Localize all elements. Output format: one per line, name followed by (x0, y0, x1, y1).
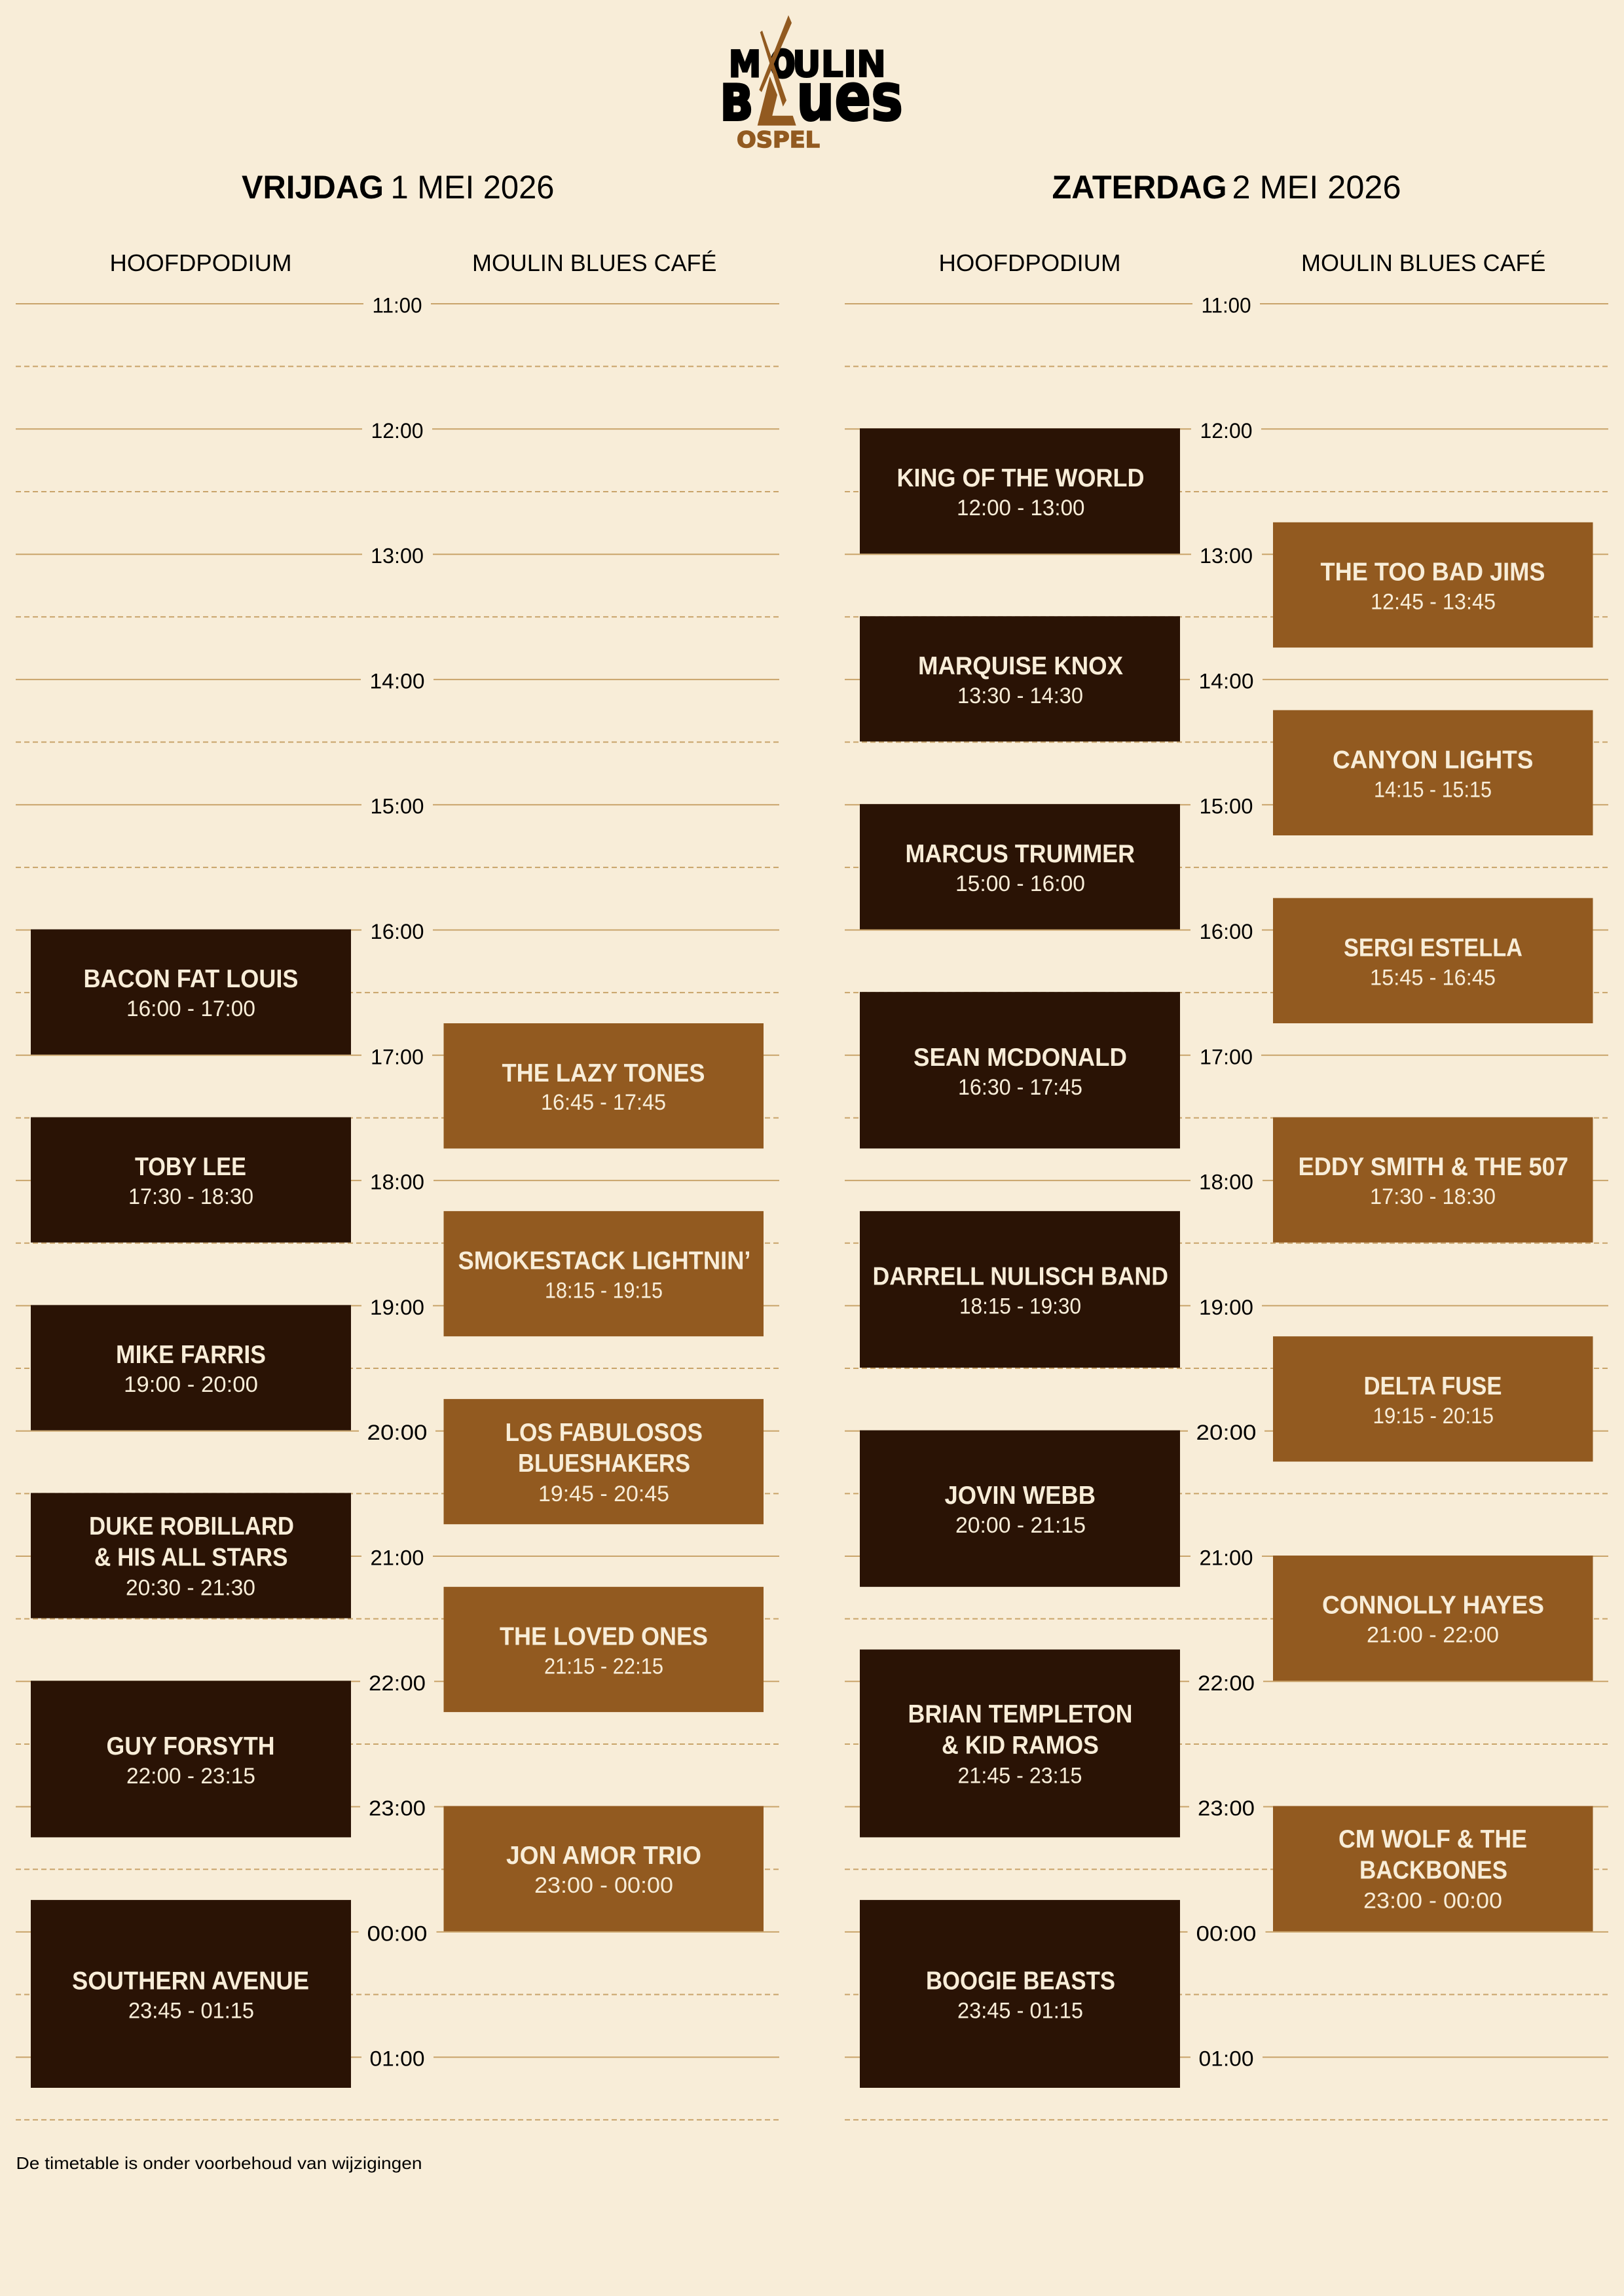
act: Jon Amor Trio (444, 1806, 764, 1931)
day heading: Vrijdag: 1 MEI 2026 (390, 169, 554, 206)
time axis labels: 20:00 (367, 1421, 427, 1444)
act: Marquise Knox (860, 616, 1180, 742)
time axis labels: 23:00 (1198, 1796, 1255, 1820)
act: The Too Bad Jims (1273, 522, 1593, 647)
time axis labels: 19:00 (1199, 1296, 1253, 1319)
logo: Moulin Blues Ospel: M (729, 43, 761, 85)
stage heading: Hoofdpodium: HOOFDPODIUM (110, 249, 292, 276)
time axis labels: 00:00 (1196, 1922, 1256, 1945)
act: Marquise Knox: MARQUISE KNOX (918, 652, 1123, 680)
time axis labels: 01:00 (369, 2047, 424, 2071)
time axis labels: 19:00 (370, 1296, 424, 1319)
time axis labels: 16:00 (1200, 920, 1253, 943)
time axis labels: 15:00 (371, 795, 424, 818)
time axis labels (367, 293, 427, 2071)
act: Southern Avenue: 23:45 - 01:15 (128, 1998, 254, 2023)
logo: Moulin Blues Ospel: ULIN (792, 43, 886, 85)
act: Toby Lee (31, 1117, 351, 1243)
act: Guy Forsyth: GUY FORSYTH (106, 1732, 275, 1760)
act: The Lazy Tones: 16:45 - 17:45 (541, 1090, 666, 1115)
time axis labels: 14:00 (1198, 669, 1253, 693)
act: Duke Robillard & His All Stars (31, 1493, 351, 1618)
act: CM Wolf & The Backbones (1273, 1806, 1593, 1931)
act: Eddy Smith & The 507: 17:30 - 18:30 (1370, 1184, 1496, 1209)
act: The Loved Ones (444, 1587, 764, 1712)
time axis labels: 13:00 (1200, 544, 1253, 568)
act: Southern Avenue: SOUTHERN AVENUE (72, 1967, 309, 1995)
logo: Moulin Blues Ospel: B (720, 74, 753, 132)
act: Darrell Nulisch Band (860, 1211, 1180, 1368)
act: Sergi Estella (1273, 898, 1593, 1023)
act: Brian Templeton & Kid Ramos: BRIAN TEMPLETON (908, 1700, 1133, 1728)
act: Bacon Fat Louis (31, 930, 351, 1055)
act: The Too Bad Jims: 12:45 - 13:45 (1371, 589, 1496, 614)
act: Canyon Lights: CANYON LIGHTS (1333, 746, 1534, 774)
time axis labels: 11:00 (372, 293, 422, 317)
act: Delta Fuse (1273, 1336, 1593, 1461)
act: Canyon Lights: 14:15 - 15:15 (1374, 777, 1492, 802)
time axis labels (1196, 293, 1256, 2071)
act: Duke Robillard & His All Stars: 20:30 - 21:30 (126, 1575, 255, 1600)
act: Jovin Webb: 20:00 - 21:15 (955, 1513, 1086, 1538)
act: Smokestack Lightnin': SMOKESTACK LIGHTNIN’ (458, 1247, 750, 1275)
time axis labels: 13:00 (371, 544, 424, 568)
act: Jon Amor Trio: 23:00 - 00:00 (534, 1873, 673, 1898)
day heading: Zaterdag: ZATERDAG (1052, 169, 1227, 206)
act: The Too Bad Jims: THE TOO BAD JIMS (1320, 558, 1545, 587)
time axis labels: 22:00 (1198, 1671, 1255, 1695)
act: Los Fabulosos Blueshakers: LOS FABULOSOS (506, 1419, 703, 1447)
act: Sean McDonald: 16:30 - 17:45 (958, 1075, 1082, 1100)
act: Smokestack Lightnin': 18:15 - 19:15 (545, 1278, 663, 1303)
act: Smokestack Lightnin' (444, 1211, 764, 1336)
stage heading: Hoofdpodium: HOOFDPODIUM (939, 249, 1121, 276)
act: Guy Forsyth (31, 1681, 351, 1837)
act: Eddy Smith & The 507 (1273, 1117, 1593, 1243)
time axis labels: 01:00 (1198, 2047, 1253, 2071)
act: Bacon Fat Louis: 16:00 - 17:00 (126, 996, 255, 1021)
act: Southern Avenue (31, 1900, 351, 2088)
time axis labels: 21:00 (1200, 1546, 1253, 1570)
time axis labels: 14:00 (369, 669, 424, 693)
act: Toby Lee: TOBY LEE (135, 1153, 246, 1181)
time axis labels: 21:00 (371, 1546, 424, 1570)
logo: Moulin Blues Ospel (720, 15, 903, 153)
act: Brian Templeton & Kid Ramos: & KID RAMOS (942, 1731, 1099, 1760)
act: Marcus Trummer: MARCUS TRUMMER (905, 840, 1135, 868)
act: CM Wolf & The Backbones: CM WOLF & THE (1338, 1825, 1527, 1853)
act: Boogie Beasts (860, 1900, 1180, 2088)
act: Canyon Lights (1273, 710, 1593, 835)
act: Toby Lee: 17:30 - 18:30 (128, 1184, 253, 1209)
time axis labels: 18:00 (1199, 1171, 1253, 1194)
act: King of the World: 12:00 - 13:00 (957, 496, 1084, 520)
time axis labels: 00:00 (367, 1922, 427, 1945)
act: Boogie Beasts: BOOGIE BEASTS (926, 1967, 1115, 1995)
act: Los Fabulosos Blueshakers: 19:45 - 20:45 (538, 1482, 669, 1506)
act: Darrell Nulisch Band: 18:15 - 19:30 (959, 1294, 1081, 1319)
act: The Lazy Tones: THE LAZY TONES (502, 1059, 705, 1087)
act: Delta Fuse: DELTA FUSE (1363, 1372, 1502, 1400)
act: Los Fabulosos Blueshakers (444, 1399, 764, 1524)
act: Darrell Nulisch Band: DARRELL NULISCH BAND (872, 1262, 1168, 1291)
day heading: Zaterdag (1052, 169, 1401, 206)
act: Bacon Fat Louis: BACON FAT LOUIS (84, 965, 299, 993)
time axis labels: 22:00 (369, 1671, 426, 1695)
act: Marcus Trummer (860, 804, 1180, 930)
time axis labels: 17:00 (1200, 1045, 1253, 1068)
act: Marcus Trummer: 15:00 - 16:00 (955, 871, 1085, 896)
logo: Moulin Blues Ospel: ues (796, 59, 903, 136)
act: Brian Templeton & Kid Ramos (860, 1650, 1180, 1837)
act: Boogie Beasts: 23:45 - 01:15 (957, 1998, 1083, 2023)
time axis labels: 23:00 (369, 1796, 426, 1820)
panel: Zaterdag 2 mei 2026 (860, 169, 1593, 2088)
act: Marquise Knox: 13:30 - 14:30 (957, 683, 1083, 708)
act: Eddy Smith & The 507: EDDY SMITH & THE 507 (1298, 1153, 1568, 1181)
stage heading: Moulin Blues Café: MOULIN BLUES CAFÉ (472, 249, 716, 276)
act: Jovin Webb: JOVIN WEBB (944, 1482, 1096, 1510)
act: Duke Robillard & His All Stars: DUKE ROBILLARD (89, 1512, 294, 1540)
act: Guy Forsyth: 22:00 - 23:15 (126, 1764, 255, 1789)
logo: Moulin Blues Ospel: OSPEL (737, 127, 820, 153)
time axis labels: 12:00 (1200, 419, 1252, 443)
time axis labels: 20:00 (1196, 1421, 1256, 1444)
footnote: De timetable is onder voorbehoud van wijzigingen (16, 2153, 422, 2173)
act: Sergi Estella: 15:45 - 16:45 (1370, 965, 1496, 990)
act: CM Wolf & The Backbones: BACKBONES (1359, 1857, 1507, 1884)
act: CM Wolf & The Backbones: 23:00 - 00:00 (1363, 1888, 1502, 1913)
time axis labels: 17:00 (371, 1045, 424, 1068)
act: King of the World (860, 428, 1180, 554)
act: The Loved Ones: THE LOVED ONES (500, 1622, 708, 1651)
day heading: Vrijdag (242, 169, 554, 206)
act: Connolly Hayes (1273, 1556, 1593, 1681)
act: Delta Fuse: 19:15 - 20:15 (1373, 1404, 1494, 1429)
day heading: Vrijdag: VRIJDAG (242, 169, 384, 206)
act: The Loved Ones: 21:15 - 22:15 (544, 1654, 663, 1679)
act: Sean McDonald (860, 992, 1180, 1148)
time axis labels: 18:00 (370, 1171, 424, 1194)
act: Connolly Hayes: 21:00 - 22:00 (1367, 1623, 1499, 1648)
time axis labels: 16:00 (371, 920, 424, 943)
act: Brian Templeton & Kid Ramos: 21:45 - 23:15 (957, 1764, 1082, 1789)
act: Sergi Estella: SERGI ESTELLA (1344, 934, 1522, 962)
act: Los Fabulosos Blueshakers: BLUESHAKERS (518, 1449, 690, 1478)
panel: Vrijdag 1 mei 2026 (31, 169, 764, 2088)
logo: Moulin Blues Ospel: O (770, 43, 795, 85)
act: Jon Amor Trio: JON AMOR TRIO (506, 1842, 701, 1870)
stage heading: Moulin Blues Café: MOULIN BLUES CAFÉ (1301, 249, 1545, 276)
day heading: Zaterdag: 2 MEI 2026 (1232, 169, 1401, 206)
act: Sean McDonald: SEAN MCDONALD (913, 1044, 1127, 1072)
time axis labels: 15:00 (1200, 795, 1253, 818)
act: Jovin Webb (860, 1430, 1180, 1587)
time axis labels: 11:00 (1201, 293, 1251, 317)
act: Mike Farris: 19:00 - 20:00 (124, 1372, 258, 1397)
act: King of the World: KING OF THE WORLD (897, 464, 1145, 492)
time axis labels: 12:00 (371, 419, 423, 443)
act: The Lazy Tones (444, 1023, 764, 1148)
act: Duke Robillard & His All Stars: & HIS ALL STARS (94, 1544, 288, 1571)
act: Mike Farris (31, 1305, 351, 1430)
act: Connolly Hayes: CONNOLLY HAYES (1322, 1592, 1544, 1620)
act: Mike Farris: MIKE FARRIS (116, 1341, 266, 1369)
